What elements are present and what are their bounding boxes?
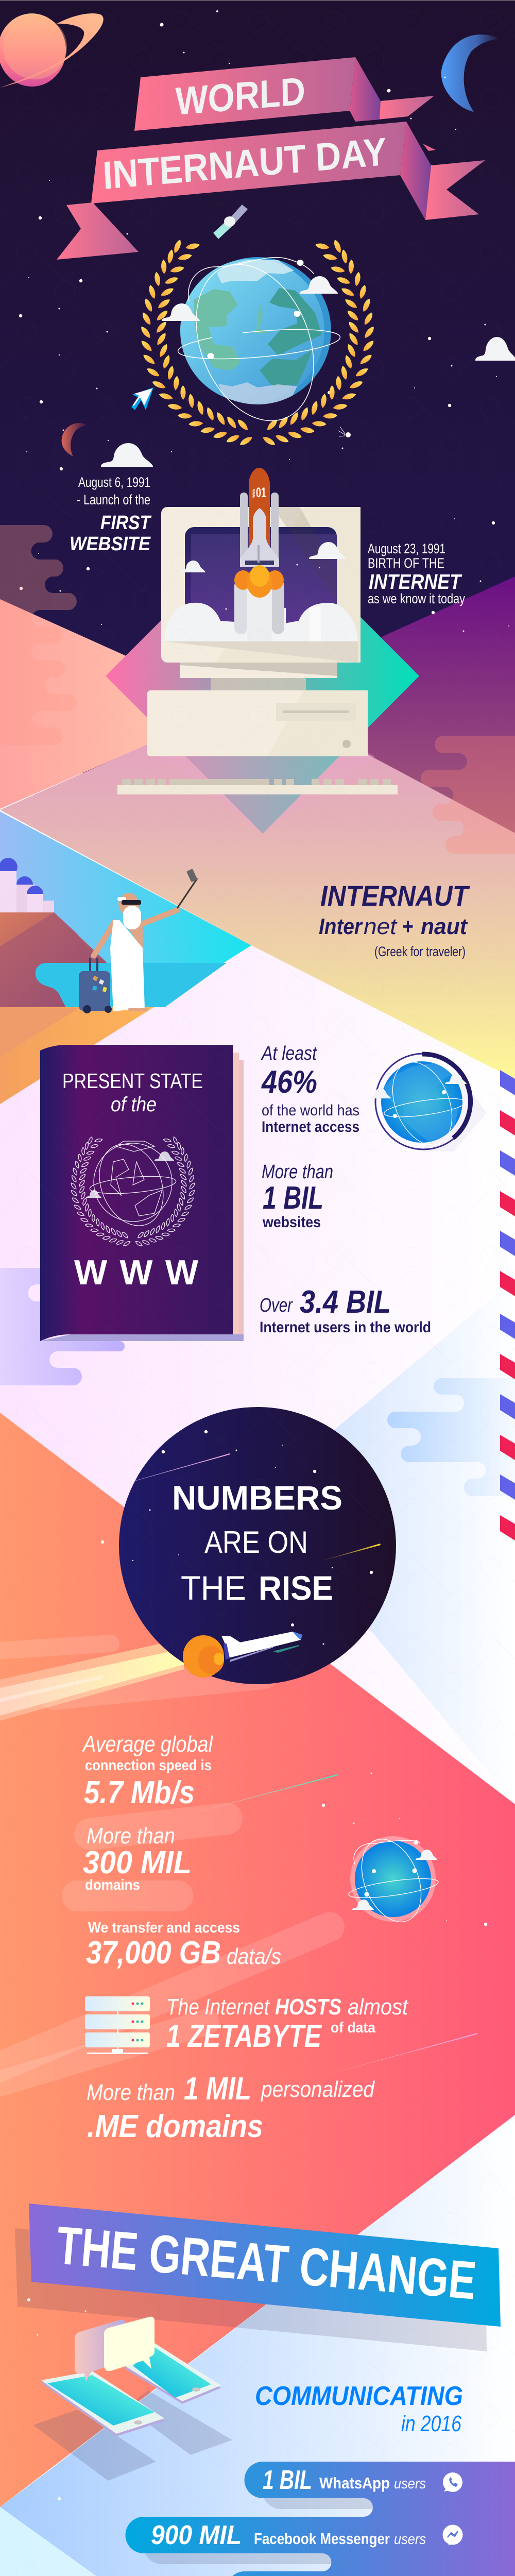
airmail stripes [500, 1070, 515, 1540]
text: definition of internaut: naut [421, 914, 468, 939]
heading: communicating in 2016 [255, 2381, 463, 2436]
back phone [125, 2343, 221, 2404]
keyboard [117, 779, 398, 794]
computer case [147, 690, 368, 756]
text: birth of the internet date: INTERNET [369, 570, 462, 594]
stat: data transfer: 37,000 GB [86, 1935, 221, 1971]
stat: 3.4 billion internet users [260, 1284, 431, 1336]
stat: connection speed: 5.7 Mb/s [84, 1775, 195, 1810]
stat: 300 million domains: More than [87, 1823, 175, 1849]
text: birth of the internet date: August 23, 1991 [368, 541, 445, 556]
icon: blue globe with ring [369, 1054, 487, 1154]
passport: present state of the www [40, 1045, 244, 1341]
stat: connection speed [81, 1732, 213, 1810]
stat: 1 billion websites: websites [262, 1214, 321, 1231]
stat: data transfer [86, 1920, 281, 1971]
stat: internet hosts 1 zetabyte: HOSTS [275, 1994, 341, 2020]
hill [0, 912, 107, 1010]
hill shade [0, 912, 98, 1007]
rocket trails [0, 1638, 184, 1721]
stat: 46% internet access: Internet access [262, 1118, 359, 1136]
passport: present state of the www: PRESENT STATE [62, 1069, 203, 1093]
white village [0, 858, 54, 912]
whatsapp row: users [394, 2476, 426, 2492]
messenger row: Facebook Messenger [254, 2530, 390, 2548]
stat: 1 billion websites: 1 BIL [263, 1180, 323, 1216]
icon: globe with orbits [177, 257, 341, 421]
illustration: phones with chat bubbles [33, 2317, 232, 2481]
numbers are on the rise circle: ARE ON [204, 1525, 308, 1560]
decorative lavender cloud [0, 1268, 125, 1385]
stat: data transfer: data/s [227, 1944, 281, 1969]
sand [0, 1007, 154, 1104]
text: first website date: August 6, 1991 [78, 474, 150, 490]
icon: ringed planet [0, 13, 104, 88]
selfie man [94, 869, 197, 1011]
icon: messenger [443, 2524, 462, 2546]
stat: 300 million domains: domains [85, 1877, 140, 1893]
illustration: Greek island [0, 858, 227, 1104]
icon: red crescent moon [62, 423, 87, 456]
icon: whatsapp [443, 2472, 462, 2492]
suitcase [79, 958, 112, 1013]
stat: 300 million domains [83, 1823, 192, 1893]
text: definition of internaut: (Greek for traveler) [374, 944, 466, 959]
heading: communicating in 2016: in 2016 [401, 2411, 461, 2436]
stat: 3.4 billion internet users: Internet users in the world [260, 1319, 431, 1336]
icon: clouds around globe [101, 276, 515, 467]
text: birth of the internet date [368, 541, 465, 606]
rocket exhaust columns [234, 580, 284, 641]
text: definition of internaut: + [402, 914, 414, 939]
messenger row: 900 MIL [151, 2520, 242, 2550]
text: birth of the internet date: BIRTH OF THE [368, 555, 444, 571]
text: first website date: WEBSITE [70, 533, 151, 555]
icon: blue crescent moon [441, 35, 501, 112]
numbers are on the rise circle: RISE [259, 1569, 333, 1607]
sea [36, 963, 227, 1007]
smoke clouds [164, 603, 358, 641]
front phone [41, 2371, 164, 2436]
stat: internet hosts 1 zetabyte: of data [331, 2020, 376, 2036]
heading: communicating in 2016: COMMUNICATING [255, 2381, 463, 2411]
stat: 1 billion websites [262, 1161, 333, 1231]
stat: 1 million .me domains: 1 MIL [184, 2071, 251, 2107]
numbers are on the rise circle: NUMBERS [172, 1479, 342, 1517]
text: first website date: FIRST [100, 512, 151, 534]
numbers are on the rise circle: THE [181, 1569, 246, 1607]
icon: sputnik [338, 427, 350, 437]
monitor [161, 507, 360, 663]
stat: connection speed: Average global [81, 1732, 213, 1757]
stat: internet hosts 1 zetabyte: The Internet [166, 1994, 270, 2020]
icon: cursor arrow [131, 387, 153, 410]
text: definition of internaut: INTERNAUT [320, 879, 470, 912]
stat: 1 billion websites: More than [262, 1161, 333, 1183]
front bubble [104, 2317, 154, 2371]
whatsapp row: WhatsApp [319, 2474, 390, 2492]
streaks and stars on orange [164, 1772, 487, 2078]
stat: 3.4 billion internet users: Over [260, 1295, 293, 1316]
laurel wreath [139, 239, 376, 447]
heading banner: The Great Change [15, 2204, 501, 2351]
stat: internet hosts 1 zetabyte: almost [348, 1994, 409, 2020]
stat: 1 million .me domains: More than [87, 2080, 175, 2105]
rocket: 01 [256, 485, 266, 500]
decorative translucent capsules on orange [0, 1643, 330, 2087]
stat: 1 million .me domains: personalized [260, 2077, 375, 2102]
text: definition of internaut [319, 879, 470, 959]
text: definition of internaut: net [364, 914, 398, 939]
emblem: line-art globe and laurel [70, 1134, 196, 1247]
stat: internet hosts 1 zetabyte: 1 ZETABYTE [166, 2019, 322, 2054]
stat: 46% internet access [261, 1043, 359, 1136]
stat: data transfer: We transfer and access [88, 1920, 240, 1936]
small stars mid section [27, 2298, 87, 2576]
stat: 1 million .me domains: .ME domains [87, 2109, 263, 2144]
stat: 46% internet access: of the world has [262, 1102, 359, 1119]
text: first website date [70, 474, 151, 555]
stat: connection speed: connection speed is [85, 1757, 212, 1774]
decorative notch [28, 1284, 46, 1301]
text: first website date: - Launch of the [77, 492, 150, 507]
decorative cloud bands left and right [0, 525, 515, 854]
whatsapp row: 1 BIL [263, 2465, 312, 2495]
background: dark space [0, 0, 515, 773]
passport: present state of the www: WWW [74, 1253, 199, 1292]
icon: satellite [213, 205, 248, 239]
title ribbon: World Internaut Day: INTERNAUT DAY [102, 130, 388, 198]
messenger row [151, 2520, 426, 2550]
title ribbon: World Internaut Day: WORLD [175, 69, 305, 124]
messenger row: users [394, 2531, 426, 2548]
text: birth of the internet date: as we know it today [368, 591, 465, 606]
text: definition of internaut: Inter [319, 914, 364, 939]
background: faceted mountains and sections [0, 519, 515, 2507]
stat: 46% internet access: 46% [261, 1064, 317, 1100]
rocket [234, 468, 284, 598]
stat: 3.4 billion internet users: 3.4 BIL [300, 1284, 391, 1320]
background: lower light facets [0, 2115, 515, 2576]
stand [180, 663, 337, 690]
whatsapp row [263, 2465, 426, 2495]
back bubble [75, 2319, 126, 2381]
stat: 1 million .me domains [87, 2071, 375, 2144]
rocket: WWW [253, 489, 256, 498]
stat: 46% internet access: At least [261, 1043, 317, 1064]
icon: flying shuttle with flame [183, 1632, 302, 1677]
icon: globe with orbiting data [348, 1831, 439, 1930]
stat: 300 million domains: 300 MIL [83, 1845, 192, 1880]
monitor clouds [180, 542, 346, 572]
panel: messaging app users [125, 2462, 515, 2576]
title ribbon: World Internaut Day [57, 57, 485, 260]
stars: upper sky [19, 10, 509, 636]
stat: internet hosts 1 zetabyte [166, 1994, 409, 2054]
passport: present state of the www: of the [111, 1093, 157, 1116]
decorative blue cloud [387, 1378, 515, 1496]
illustration: retro computer with rocket launch [117, 468, 398, 794]
numbers are on the rise circle [66, 1407, 396, 1684]
icon: server stack [85, 1996, 150, 2054]
